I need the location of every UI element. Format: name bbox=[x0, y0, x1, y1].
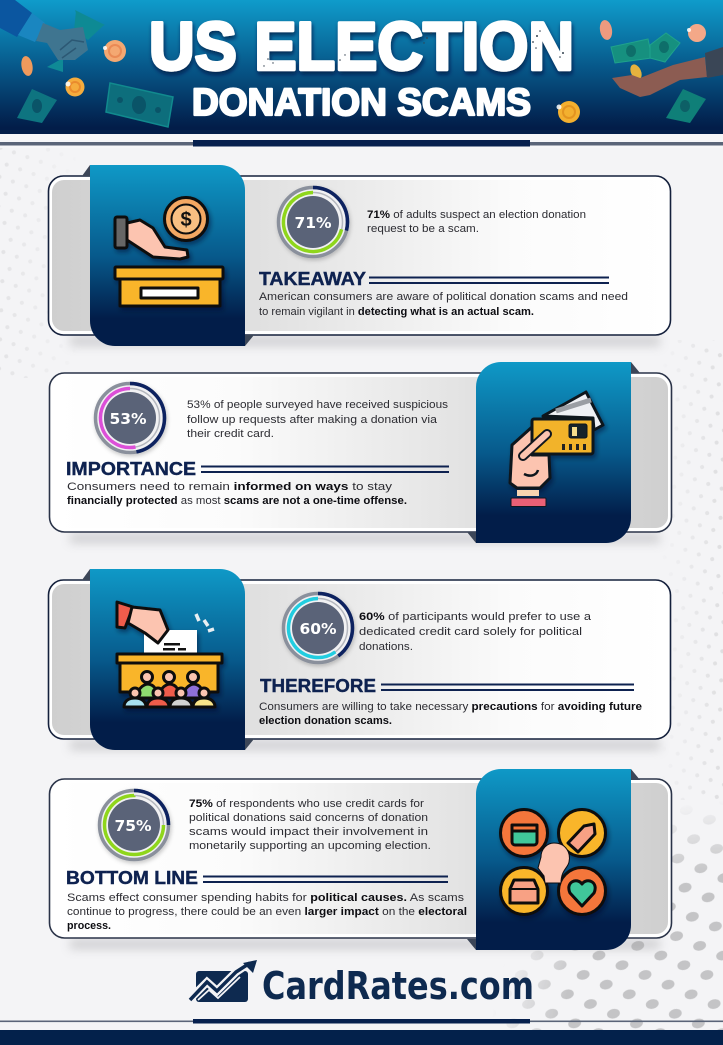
takeaway text bbox=[259, 291, 628, 318]
stat text 53%: 53% of people surveyed have received suspicious bbox=[187, 399, 449, 411]
logo: CardRates.com bbox=[190, 960, 534, 1008]
bottom line text: Scams effect consumer spending habits for political causes. As scams bbox=[67, 892, 465, 904]
header banner bbox=[0, 0, 723, 134]
stat text 75%: political donations said concerns of donation bbox=[189, 812, 428, 824]
therefore text: Consumers are willing to take necessary precautions for avoiding future bbox=[259, 701, 642, 713]
stat text 71%: 71% of adults suspect an election donation bbox=[367, 209, 586, 221]
icon tile bbox=[90, 165, 245, 346]
center head bbox=[538, 843, 569, 883]
icon tile bbox=[476, 769, 631, 950]
progress ring 60% bbox=[277, 587, 359, 669]
icon: consumer mind with shopping bubbles bbox=[500, 810, 606, 914]
progress ring 53%: 53% bbox=[109, 410, 147, 428]
stat text 60%: 60% of participants would prefer to use a bbox=[359, 611, 592, 623]
progress ring 60%: 60% bbox=[299, 620, 337, 638]
icon: dollar bills left bbox=[17, 83, 173, 127]
title: DONATION SCAMS: DONATION SCAMS bbox=[192, 82, 531, 124]
dollar sign: $ bbox=[180, 209, 192, 231]
fold corners bbox=[467, 769, 640, 950]
panel: card 2 importance bbox=[50, 362, 672, 543]
heading: takeaway: TAKEAWAY bbox=[259, 269, 366, 289]
icon tile bbox=[90, 569, 245, 750]
stat text 53% bbox=[187, 399, 449, 440]
card frame bbox=[48, 580, 670, 739]
bottom line text: process. bbox=[67, 920, 111, 932]
card frame bbox=[50, 373, 672, 532]
halftone dots: right edge bbox=[682, 340, 723, 800]
halftone dots: bottom right bbox=[506, 815, 723, 1030]
icon: ballot box with voters bbox=[117, 602, 222, 707]
fold corners bbox=[82, 569, 254, 750]
stat text 53%: their credit card. bbox=[187, 428, 274, 440]
importance text bbox=[67, 481, 407, 507]
heading: therefore: THEREFORE bbox=[260, 676, 376, 696]
footer bar bbox=[0, 1030, 723, 1045]
bottom line text: continue to progress, there could be an even larger impact on the electoral bbox=[67, 906, 467, 918]
stat text 60% bbox=[359, 611, 592, 653]
progress ring 75% bbox=[100, 790, 168, 860]
stat text 60%: donations. bbox=[359, 641, 413, 653]
icon: coins left bbox=[20, 40, 126, 96]
card inner shading bbox=[53, 783, 668, 934]
icon tile bbox=[476, 362, 631, 543]
panel: card 3 therefore bbox=[48, 569, 670, 750]
heading: bottom line: BOTTOM LINE bbox=[66, 868, 198, 888]
card details and cuff bbox=[511, 427, 586, 506]
icon: hand dropping coin in box bbox=[115, 198, 223, 306]
therefore text: election donation scams. bbox=[259, 715, 392, 727]
header divider bbox=[0, 134, 723, 148]
takeaway text: American consumers are aware of political donation scams and need bbox=[259, 291, 628, 303]
progress ring 71%: 71% bbox=[294, 214, 332, 232]
icon: coins right bbox=[556, 19, 706, 123]
heading: importance: IMPORTANCE bbox=[66, 459, 196, 479]
title speckles bbox=[263, 30, 564, 67]
footer divider bbox=[0, 1019, 723, 1024]
fold corners bbox=[467, 362, 640, 543]
importance text: financially protected as most scams are not a one-time offense. bbox=[67, 495, 407, 507]
importance text: Consumers need to remain informed on ways to stay bbox=[67, 481, 393, 493]
icon: card with rising chart bbox=[190, 960, 257, 1002]
icon: open hand receiving coin bbox=[612, 47, 723, 97]
card inner shading bbox=[53, 377, 668, 528]
icon: hand holding credit card bbox=[510, 392, 603, 488]
panel: card 1 takeaway bbox=[48, 165, 670, 346]
card frame bbox=[50, 779, 672, 938]
ballot marks and sparks bbox=[163, 614, 214, 650]
card inner shading bbox=[52, 584, 667, 735]
stat text 53%: follow up requests after making a donation via bbox=[187, 414, 438, 426]
panel: card 4 bottom line bbox=[50, 769, 672, 950]
stat text 71%: request to be a scam. bbox=[367, 223, 479, 235]
icon: fist holding cash bbox=[0, 0, 105, 72]
progress ring 53% bbox=[95, 383, 165, 453]
stat text 60%: dedicated credit card solely for political bbox=[359, 626, 582, 638]
progress ring 71% bbox=[277, 186, 349, 258]
fold corners bbox=[82, 165, 254, 346]
stat text 75%: scams would impact their involvement in bbox=[189, 826, 428, 838]
card frame bbox=[48, 176, 670, 335]
stat text 71% bbox=[367, 209, 586, 235]
wordmark: CardRates.com bbox=[262, 964, 534, 1008]
takeaway text: to remain vigilant in detecting what is an actual scam. bbox=[259, 306, 534, 318]
stat text 75%: 75% of respondents who use credit cards for bbox=[189, 798, 424, 810]
halftone dots: upper left bbox=[0, 148, 43, 378]
icon: dollar bills right bbox=[611, 33, 706, 123]
bottom line text bbox=[67, 892, 467, 932]
card inner shading bbox=[52, 180, 667, 331]
progress ring 75%: 75% bbox=[114, 817, 152, 835]
therefore text bbox=[259, 701, 642, 727]
stat text 75%: monetarily supporting an upcoming election. bbox=[189, 840, 431, 852]
title: US ELECTION: US ELECTION bbox=[149, 8, 574, 84]
stat text 75% bbox=[189, 798, 431, 852]
thumb bbox=[523, 434, 547, 456]
